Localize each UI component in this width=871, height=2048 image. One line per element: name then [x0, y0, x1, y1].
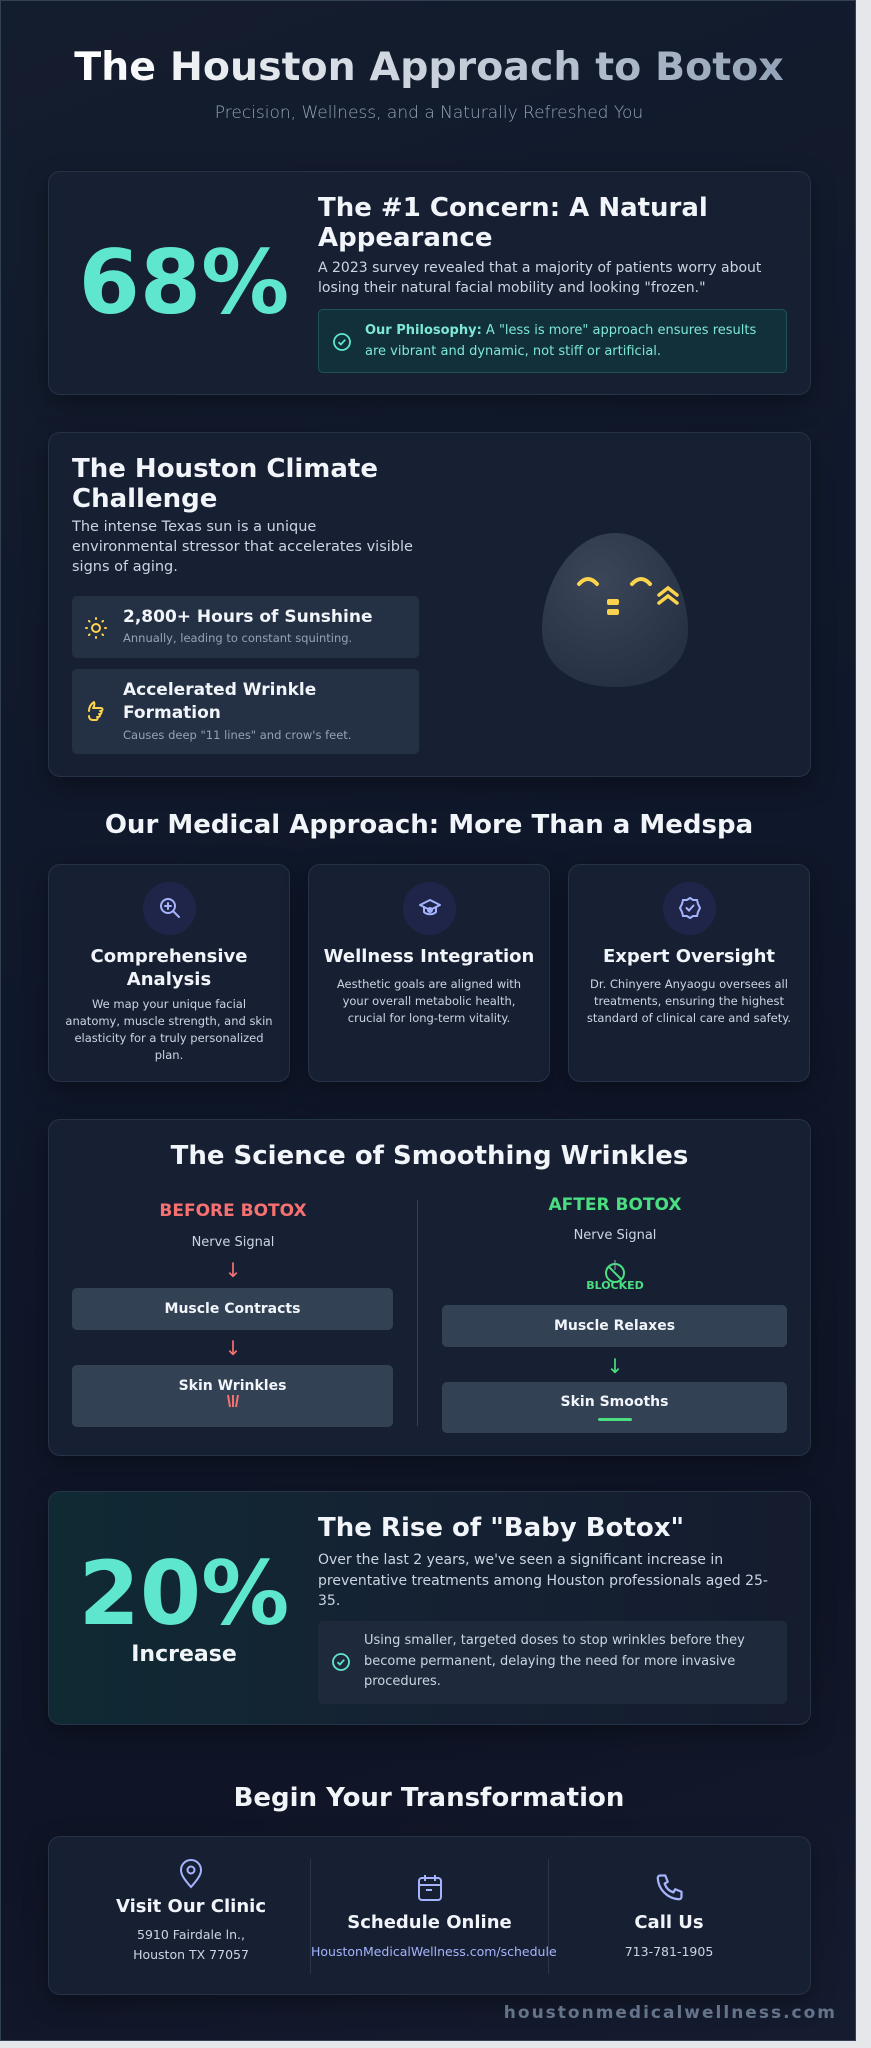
heading: The Science of Smoothing Wrinkles — [171, 1141, 688, 1171]
column: after: Nerve Signal — [574, 1228, 656, 1243]
text: The intense Texas sun is a unique — [72, 519, 316, 535]
column: after — [442, 1195, 787, 1433]
text: Over the last 2 years, we've seen a significant increase in preventative treatments among Houston professionals aged 25-35. — [318, 1552, 768, 1609]
divider — [417, 1200, 418, 1426]
arrow: ↓ — [607, 1354, 623, 1378]
stat 20%: 20% — [79, 1542, 289, 1645]
contact: call: 713-781-1905 — [625, 1944, 713, 1959]
contact: call: Call Us — [634, 1912, 704, 1933]
panel: baby botox: Increase — [131, 1642, 237, 1667]
box: skin wrinkles: Skin Wrinkles — [179, 1378, 286, 1394]
box: muscle contracts — [72, 1288, 393, 1330]
item: wrinkles: Accelerated Wrinkle Formation — [123, 680, 316, 723]
contact: clinic — [116, 1859, 266, 1962]
text: environmental stressor that accelerates visible — [72, 539, 413, 555]
stat 68%: 68% — [79, 231, 289, 334]
panel: wellness integration — [308, 864, 550, 1082]
icon: hand — [88, 701, 104, 721]
arrow: ↓ — [225, 1336, 241, 1360]
panel: comprehensive analysis — [48, 864, 290, 1082]
contact: schedule: Schedule Online — [347, 1912, 512, 1933]
footer url: houstonmedicalwellness.com — [504, 2003, 837, 2023]
panel: climate challenge — [48, 432, 811, 777]
box: muscle relaxes — [442, 1305, 787, 1347]
box: skin smooths — [442, 1382, 787, 1433]
heading: The #1 Concern: A Natural Appearance — [318, 193, 708, 253]
item: sunshine — [72, 596, 419, 658]
icon: check — [333, 333, 351, 351]
box: skin smooths: Skin Smooths — [561, 1394, 668, 1410]
icon: blocked — [605, 1260, 625, 1283]
panel: comprehensive analysis: Comprehensive — [91, 946, 247, 967]
contact: schedule — [311, 1875, 557, 1959]
callout: Using smaller, targeted doses to stop wrinkles before they become permanent, delaying the need for more invasive procedures. — [364, 1633, 745, 1689]
text: signs of aging. — [72, 559, 178, 575]
icon: sun — [85, 617, 107, 639]
subtitle: Precision, Wellness, and a Naturally Refreshed You — [215, 103, 643, 123]
icon: magnifier — [143, 882, 196, 935]
panel: expert oversight: Dr. Chinyere Anyaogu oversees all treatments, ensuring the highest standard of clinical care and safety. — [587, 977, 791, 1025]
panel: natural appearance — [48, 171, 811, 395]
heading: begin transformation: Begin Your Transformation — [234, 1783, 624, 1813]
callout — [318, 1621, 787, 1704]
heading: medical approach: Our Medical Approach: More Than a Medspa — [105, 810, 753, 840]
panel: science of smoothing — [48, 1119, 811, 1456]
icon: check — [332, 1653, 350, 1671]
illustration: squinting face — [542, 533, 688, 687]
title: The Houston Approach to Botox — [74, 44, 784, 90]
panel: comprehensive analysis: We map your unique facial anatomy, muscle strength, and skin elasticity for a truly personalized plan. — [65, 997, 273, 1062]
column: before: BEFORE BOTOX — [159, 1201, 307, 1221]
panel: wellness integration: Aesthetic goals are aligned with your overall metabolic health, crucial for long-term vitality. — [337, 977, 521, 1025]
callout: philosophy: Our Philosophy: A "less is more" approach ensures results are vibrant and dynamic, not stiff or artificial. — [365, 323, 756, 359]
panel: expert oversight — [568, 864, 810, 1082]
panel: contact — [48, 1836, 811, 1995]
column: before: Nerve Signal — [192, 1235, 274, 1250]
icon: badge check — [663, 882, 716, 935]
contact: clinic: Visit Our Clinic — [116, 1896, 266, 1917]
heading: The Houston Climate Challenge — [72, 454, 378, 514]
panel: expert oversight: Expert Oversight — [603, 946, 775, 967]
text: A 2023 survey revealed that a majority of patients worry about losing their natural facial mobility and looking "frozen." — [318, 260, 761, 296]
column: after: AFTER BOTOX — [549, 1195, 681, 1215]
item: wrinkles: Causes deep "11 lines" and crow's feet. — [123, 728, 351, 742]
heading: The Rise of "Baby Botox" — [318, 1513, 684, 1543]
item: sunshine: Annually, leading to constant squinting. — [123, 631, 352, 645]
contact: schedule: HoustonMedicalWellness.com/schedule — [311, 1944, 557, 1959]
panel: comprehensive analysis: Analysis — [127, 969, 211, 990]
column: before — [72, 1201, 393, 1427]
box: muscle relaxes: Muscle Relaxes — [554, 1318, 675, 1334]
callout: philosophy — [318, 309, 787, 373]
icon: grad cap — [403, 882, 456, 935]
item: wrinkles — [72, 669, 419, 754]
panel: wellness integration: Wellness Integration — [324, 946, 534, 967]
arrow: ↓ — [225, 1258, 241, 1282]
contact: clinic: 5910 Fairdale ln., — [137, 1927, 245, 1942]
item: sunshine: 2,800+ Hours of Sunshine — [123, 607, 372, 627]
box: skin wrinkles — [72, 1365, 393, 1427]
panel: baby botox — [48, 1491, 811, 1725]
column: after: BLOCKED — [586, 1279, 644, 1292]
box: muscle contracts: Muscle Contracts — [165, 1301, 300, 1317]
contact: clinic: Houston TX 77057 — [133, 1947, 249, 1962]
contact: call — [625, 1874, 713, 1959]
text — [72, 519, 413, 575]
